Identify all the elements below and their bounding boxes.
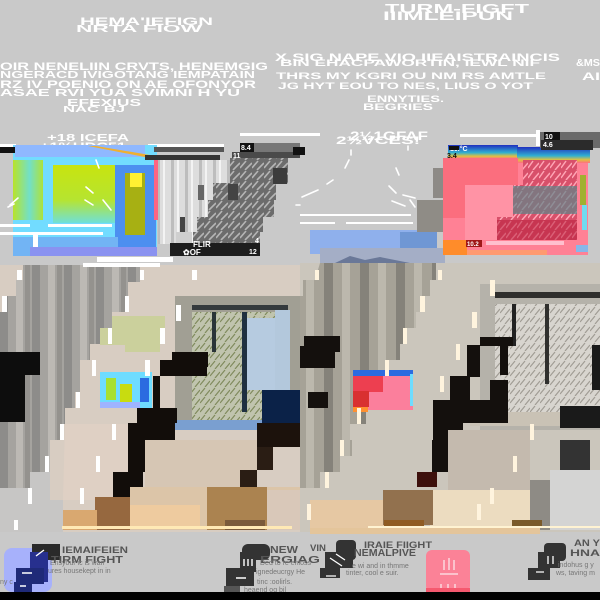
- warm left side: [443, 158, 518, 218]
- blue right zone: [115, 165, 156, 255]
- left description text: ASAE RVI YUA SVIMNI H YU: [0, 88, 240, 99]
- feature heading: ERGIAG: [260, 555, 320, 566]
- window: [165, 296, 300, 430]
- feature text: heaend og bil: [244, 587, 286, 594]
- panel: top-right dark corner photo: 4.6: [543, 142, 553, 149]
- staircase highlights: [2, 270, 197, 530]
- icon: pink heat tile: [426, 550, 470, 592]
- right description text: JG HYT EOU TO NES, LIUS O YOT: [278, 81, 534, 91]
- panel: left grayscale thermal photo: 8.4: [241, 145, 251, 152]
- panel: right thermal image: 3.4: [447, 153, 457, 160]
- feature heading: NEMALPIVE: [354, 548, 416, 559]
- feature: new vin energy: [224, 543, 326, 594]
- panel: blue sky strip: [310, 230, 445, 263]
- small thermal overlay: [353, 370, 413, 412]
- feature text: Ensyour ic is warr: [50, 560, 106, 567]
- window: [470, 284, 600, 430]
- panel: left grayscale thermal photo: [0, 143, 305, 257]
- left description text: NGERACD IVIGOTANG IEMPATAIN: [0, 70, 255, 81]
- panel: top-right dark corner photo: 10: [545, 134, 553, 141]
- panel: right room photo: [300, 263, 600, 534]
- feature heading: VIN: [310, 543, 326, 553]
- right description text: BIN EHACPAWORTIN, IEWL NIF: [280, 58, 541, 68]
- feature text: [346, 563, 409, 577]
- feature heading: NEW: [270, 545, 299, 556]
- feature text: [555, 562, 595, 577]
- left heading: NRTA FIOW: [76, 24, 203, 35]
- feature text: [244, 560, 311, 594]
- left description text: EFEXIUS: [67, 98, 142, 109]
- icon: snowflake block: [320, 540, 356, 578]
- right heading: TURM-FIGFT: [385, 1, 529, 16]
- skirting and floor: [310, 430, 600, 534]
- feature text: [0, 560, 111, 586]
- icon: dark energy block: [528, 543, 566, 580]
- chair right: [240, 390, 300, 487]
- white frame lines: [0, 133, 536, 224]
- icon: blue house tile: [4, 544, 60, 592]
- tree region: [497, 160, 577, 240]
- left heading: HEMA'IEFIGN: [80, 16, 213, 28]
- panel: left grayscale thermal photo: ✿OF: [183, 248, 201, 257]
- feature heading: [51, 545, 128, 566]
- right description text: ENNYTIES.: [367, 94, 444, 104]
- left description text: RZ IV POENIO ON AE OFONYOR: [0, 79, 256, 91]
- curtains: [300, 263, 436, 488]
- left temperature label: +1%UDC51: [40, 141, 126, 153]
- right description text: THRS MY KGRI OU NM RS AMTLE: [276, 71, 546, 81]
- feature heading: [570, 538, 600, 558]
- lower band: [13, 237, 118, 256]
- right description text: &MS: [576, 58, 600, 69]
- panel: right thermal image: [417, 145, 590, 255]
- chair right: [560, 345, 600, 470]
- left description text: NAC BJ: [63, 105, 125, 114]
- dark patterned foliage: [193, 158, 288, 245]
- bottom black bar: [0, 592, 600, 600]
- left description text: [0, 61, 268, 114]
- lower left floor area: [0, 472, 63, 532]
- staircase highlights: [307, 270, 534, 520]
- left temperature label: [40, 133, 129, 153]
- panel: left thermal image: [0, 145, 173, 267]
- small thermal overlay: [100, 372, 152, 408]
- left heading: [76, 16, 213, 35]
- chair centre: [113, 352, 208, 497]
- panel: left room photo: [0, 265, 300, 532]
- top rainbow band: [448, 145, 518, 159]
- panel: left grayscale thermal photo: 11: [233, 153, 241, 160]
- panel: right thermal image: 10.2: [467, 242, 479, 248]
- right heading: [383, 1, 529, 23]
- chair centre: [417, 337, 513, 487]
- right description text: [275, 52, 600, 112]
- feature heading: AN Y: [574, 538, 600, 548]
- right description text: AI: [582, 71, 600, 83]
- right description text: BEGRIES: [363, 102, 433, 112]
- wall below window: [145, 440, 257, 490]
- panel: left grayscale thermal photo: 4: [255, 238, 259, 245]
- curtains: [0, 265, 140, 488]
- chair left: [0, 352, 40, 422]
- feature text: e wi and in thmme: [352, 563, 409, 570]
- feature heading: [354, 540, 433, 559]
- green ghost thermal in wall: [100, 316, 165, 352]
- feature: warm flight: [0, 544, 128, 592]
- right edge colours: [580, 175, 586, 205]
- right description text: X SIG NAPE VIO IIEAISTRAINCIS: [275, 52, 560, 64]
- feature: windows saving: [528, 538, 600, 580]
- arrows: curved dashes to thermal images: [8, 146, 415, 210]
- left description text: OIR NENELIIN CRVTS, HENEMGIG: [0, 61, 268, 73]
- right temperature label: [336, 129, 428, 147]
- chair left: [300, 336, 340, 408]
- left temperature label: +18 ICEFA: [47, 133, 129, 144]
- feature text: ures housekept in in: [48, 568, 111, 575]
- feature text: ws, taving m: [555, 570, 595, 577]
- panel: right thermal image: 10.°C: [450, 145, 468, 153]
- icon: heat waves: [224, 544, 270, 592]
- panel: left grayscale thermal photo: 12: [249, 249, 257, 256]
- feature heading: [260, 543, 326, 566]
- feature text: indohus g y: [558, 562, 594, 569]
- wood floor and rug: [62, 487, 300, 530]
- feature text: tinc :oolirls.: [257, 579, 292, 586]
- feature text: ignedeucrgy He: [256, 569, 305, 576]
- warm wall panels: [13, 160, 43, 220]
- feature: winter flight: [320, 540, 433, 578]
- right temperature label: 2½1GFAF: [350, 129, 428, 143]
- panel: top-right dark corner photo: [536, 130, 600, 150]
- feature heading: HNA: [570, 548, 600, 558]
- feature heading: TIRM FIGHT: [51, 555, 123, 566]
- feature heading: IRAIE FIIGHT: [364, 540, 433, 550]
- pale wall lower: [63, 424, 130, 500]
- feature heading: IEMAIFEIEN: [62, 545, 128, 555]
- panel: left grayscale thermal photo: FLIR: [193, 240, 211, 249]
- right heading: IIIMLEIPUN: [383, 9, 513, 23]
- feature text: Ded to re enloss: [260, 560, 311, 567]
- bottom left orange: [443, 240, 467, 255]
- feature text: tinter, cool e suir.: [346, 570, 399, 577]
- right temperature label: 2½VCES!: [336, 135, 420, 147]
- feature text: ny c: [0, 579, 13, 586]
